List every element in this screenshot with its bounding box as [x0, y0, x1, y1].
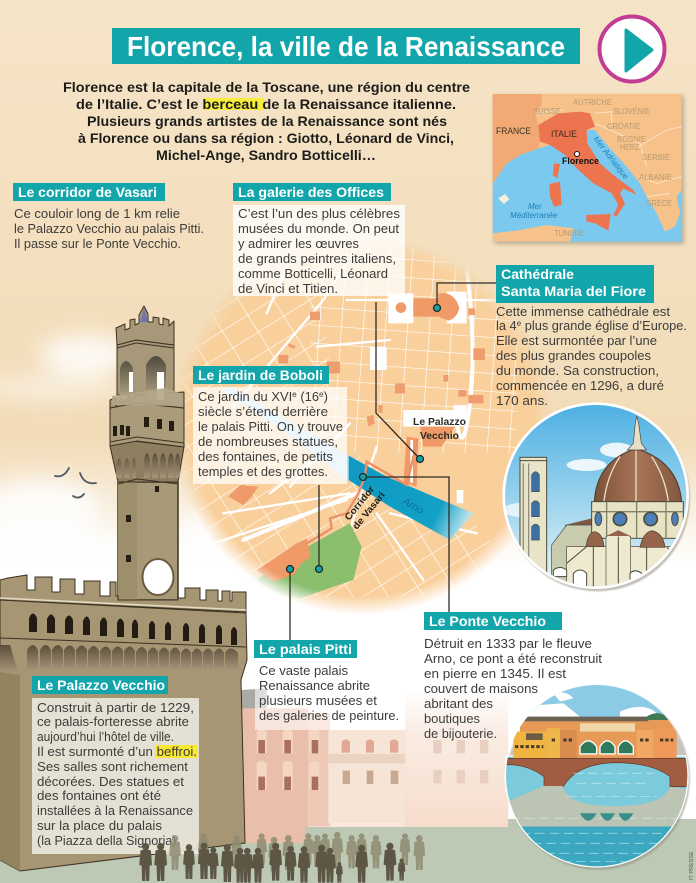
panel: cathédrale Santa Maria del Fiore: des plus grandes coupoles — [496, 349, 651, 363]
panel: cathédrale Santa Maria del Fiore — [496, 265, 687, 408]
city map of Florence — [180, 244, 546, 614]
panel: le jardin de Boboli: e — [292, 390, 297, 399]
panel: le palais Pitti — [254, 640, 403, 730]
panel: la galerie des Offices: C’est l’un des plus célèbres — [238, 207, 400, 221]
intro text: à Florence ou dans sa région : Giotto, Léonard de Vinci, — [78, 130, 454, 146]
panel: le palais Pitti: des galeries de peinture. — [259, 709, 399, 723]
locator map of Italy: TUNISIE — [554, 228, 584, 238]
panel: le Palazzo Vecchio: Ses salles sont richement — [37, 760, 189, 774]
panel: le Ponte Vecchio: Le Ponte Vecchio — [429, 613, 546, 629]
Arno river — [222, 387, 350, 482]
map labels: de Vasari — [351, 490, 388, 532]
panel: le corridor de Vasari: le Palazzo Vecchio au palais Pitti. — [14, 222, 204, 236]
panel: le corridor de Vasari: Ce couloir long de 1 km relie — [14, 207, 180, 221]
intro text — [63, 79, 470, 163]
map labels — [343, 417, 466, 532]
piazza areas — [370, 292, 467, 503]
panel: le jardin de Boboli: temples et des grottes. — [198, 465, 328, 479]
map labels: Le Palazzo — [413, 417, 466, 428]
panel: le corridor de Vasari — [13, 183, 204, 251]
panel: le Ponte Vecchio: en pierre en 1345. Il est — [424, 667, 567, 681]
panel: le Palazzo Vecchio: Construit à partir de 1229, — [37, 701, 194, 715]
locator map of Italy: ITALIE — [551, 129, 577, 139]
panel: cathédrale Santa Maria del Fiore: 170 ans. — [496, 394, 548, 408]
panel: cathédrale Santa Maria del Fiore: Santa Maria del Fiore — [501, 283, 646, 299]
title: Florence, la ville de la Renaissance — [127, 31, 565, 62]
panel: la galerie des Offices: de Vinci et Titien. — [238, 282, 338, 296]
palace body — [0, 600, 247, 871]
illustration: Ponte Vecchio — [503, 683, 690, 870]
palazzo vecchio illustration — [0, 306, 247, 871]
side nave — [565, 518, 592, 526]
map labels: Vecchio — [420, 431, 459, 442]
tower clock — [142, 559, 174, 595]
panel: le Ponte Vecchio: couvert de maisons — [424, 682, 538, 696]
locator map of Italy: GRÈCE — [646, 198, 672, 208]
panel: le jardin de Boboli: Ce jardin du XVI — [198, 390, 289, 404]
panel: le jardin de Boboli: ) — [324, 390, 328, 404]
locator map of Italy: SLOVÉNIE — [613, 106, 650, 116]
panel: le palais Pitti: Ce vaste palais — [259, 664, 348, 678]
panel: cathédrale Santa Maria del Fiore: e — [517, 319, 522, 328]
locator map of Italy: BOSNIE — [617, 134, 646, 144]
panel: le Ponte Vecchio: boutiques — [424, 712, 480, 726]
panel: cathédrale Santa Maria del Fiore: la 4 — [496, 319, 516, 333]
lantern — [627, 416, 647, 450]
panel: la galerie des Offices: La galerie des Offices — [238, 184, 384, 200]
panel: le jardin de Boboli: (16 — [297, 390, 319, 404]
corbels — [27, 645, 238, 670]
panel: le Palazzo Vecchio: décorées. Des statues et — [37, 775, 185, 789]
locator map of Italy: ALBANIE — [639, 172, 672, 182]
Boboli garden — [253, 523, 362, 598]
panel: le jardin de Boboli: Le jardin de Boboli — [198, 367, 323, 383]
panel: le Palazzo Vecchio: (la Piazza della Signoria). — [37, 834, 180, 848]
panel: cathédrale Santa Maria del Fiore: du monde. Sa construction, — [496, 364, 659, 378]
panel: le Palazzo Vecchio: aujourd’hui l’hôtel de ville. — [37, 730, 174, 744]
panel: le corridor de Vasari: Le corridor de Vasari — [18, 184, 157, 200]
locator map of Italy — [493, 94, 684, 244]
panel: le Ponte Vecchio: abritant des — [424, 697, 493, 711]
panel: le Palazzo Vecchio: ce palais-forteresse abrite — [37, 715, 189, 729]
panel: le Ponte Vecchio: Détruit en 1333 par le fleuve — [424, 637, 592, 651]
panel: la galerie des Offices — [233, 183, 405, 296]
tower — [110, 306, 184, 600]
panel: le jardin de Boboli: siècle s’étend derrière — [198, 405, 328, 419]
orange buildings — [278, 308, 485, 427]
panel: le Ponte Vecchio: de bijouterie. — [424, 727, 497, 741]
panel: le jardin de Boboli: de nombreuses statues, — [198, 435, 338, 449]
locator map of Italy: FRANCE — [496, 126, 531, 136]
panel: cathédrale Santa Maria del Fiore: Cathédrale — [501, 266, 574, 282]
panel: la galerie des Offices: comme Botticelli, Léonard — [238, 267, 388, 281]
panel: le palais Pitti: Renaissance abrite — [259, 679, 370, 693]
crowd of people silhouettes — [139, 832, 425, 883]
panel: le Palazzo Vecchio: des fontaines ont été — [37, 789, 161, 803]
credit: IT PRESSE — [689, 851, 695, 880]
locator map of Italy: Méditerranée — [510, 211, 558, 220]
drum — [592, 502, 683, 538]
panel: le Ponte Vecchio — [424, 612, 603, 741]
intro text: de l’Italie. C’est le berceau de la Renaissance italienne. — [76, 96, 456, 112]
panel: le Palazzo Vecchio: Le Palazzo Vecchio — [37, 677, 165, 693]
panel: la galerie des Offices: de grands peintres italiens, — [238, 252, 396, 266]
panel: le jardin de Boboli: le palais Pitti. On y trouve — [198, 420, 343, 434]
palace windows — [29, 614, 237, 645]
intro text: Plusieurs grands artistes de la Renaissance sont nés — [87, 113, 447, 129]
map dots — [286, 304, 440, 572]
locator map of Italy: CROATIE — [607, 121, 640, 131]
panel: le Palazzo Vecchio: sur la place du palais — [37, 819, 162, 833]
panel: le jardin de Boboli: des fontaines, de petits — [198, 450, 333, 464]
river water — [503, 786, 690, 827]
panel: le jardin de Boboli: e — [319, 390, 324, 399]
panel: cathédrale Santa Maria del Fiore: commencée en 1296, a duré — [496, 379, 664, 393]
belfry arches — [120, 356, 166, 400]
tower windows — [113, 417, 174, 562]
locator map of Italy: SERBIE — [642, 152, 670, 162]
locator map of Italy: SUISSE — [533, 106, 561, 116]
panel: le corridor de Vasari: Il passe sur le Ponte Vecchio. — [14, 237, 181, 251]
intro text: Michel-Ange, Sandro Botticelli… — [156, 147, 376, 163]
panel: le palais Pitti: Le palais Pitti — [259, 641, 352, 657]
panel: le Palazzo Vecchio: installées à la Renaissance — [37, 804, 193, 818]
panel: cathédrale Santa Maria del Fiore: Cette immense cathédrale est — [496, 305, 671, 319]
locator map of Italy: HERZ. — [620, 142, 641, 152]
street network — [213, 237, 517, 580]
Palazzo Vecchio building — [403, 427, 455, 487]
lower apses — [566, 546, 671, 586]
ground — [0, 819, 696, 883]
bridge — [503, 758, 690, 787]
panel: le jardin de Boboli — [193, 366, 347, 484]
birds — [55, 468, 96, 498]
panel: cathédrale Santa Maria del Fiore: Elle est surmontée par l’une — [496, 334, 657, 348]
panel: le Ponte Vecchio: Arno, ce pont a été reconstruit — [424, 652, 603, 666]
locator map of Italy: Mer Adriatique — [591, 135, 631, 181]
campanile — [520, 457, 547, 577]
panel: le Palazzo Vecchio: Il est surmonté d’un beffroi. — [37, 745, 197, 759]
map labels: Corridor — [343, 484, 377, 523]
connector lines — [290, 283, 496, 640]
panel: le Palazzo Vecchio — [32, 676, 199, 854]
panel: la galerie des Offices: musées du monde. On peut — [238, 222, 400, 236]
panel: la galerie des Offices: y admirer les œuvres — [238, 237, 359, 251]
Pitti palace illustration — [242, 688, 508, 880]
icon: play button — [600, 16, 664, 82]
panel: cathédrale Santa Maria del Fiore: plus grande église d’Europe. — [521, 319, 687, 333]
map labels: Arno — [400, 495, 426, 517]
Boboli side building — [228, 485, 258, 505]
palace crenellated top — [0, 575, 246, 612]
houses — [520, 718, 673, 758]
locator map of Italy: Mer — [528, 202, 542, 211]
locator map of Italy: AUTRICHE — [573, 97, 612, 107]
locator map of Italy: Florence — [562, 156, 599, 166]
Vasari corridor — [307, 439, 418, 543]
dome — [594, 450, 682, 502]
Palazzo Pitti — [257, 538, 311, 582]
panel: le palais Pitti: plusieurs musées et — [259, 694, 378, 708]
intro text: Florence est la capitale de la Toscane, une région du centre — [63, 79, 470, 95]
illustration: cathedral dome — [500, 400, 690, 593]
